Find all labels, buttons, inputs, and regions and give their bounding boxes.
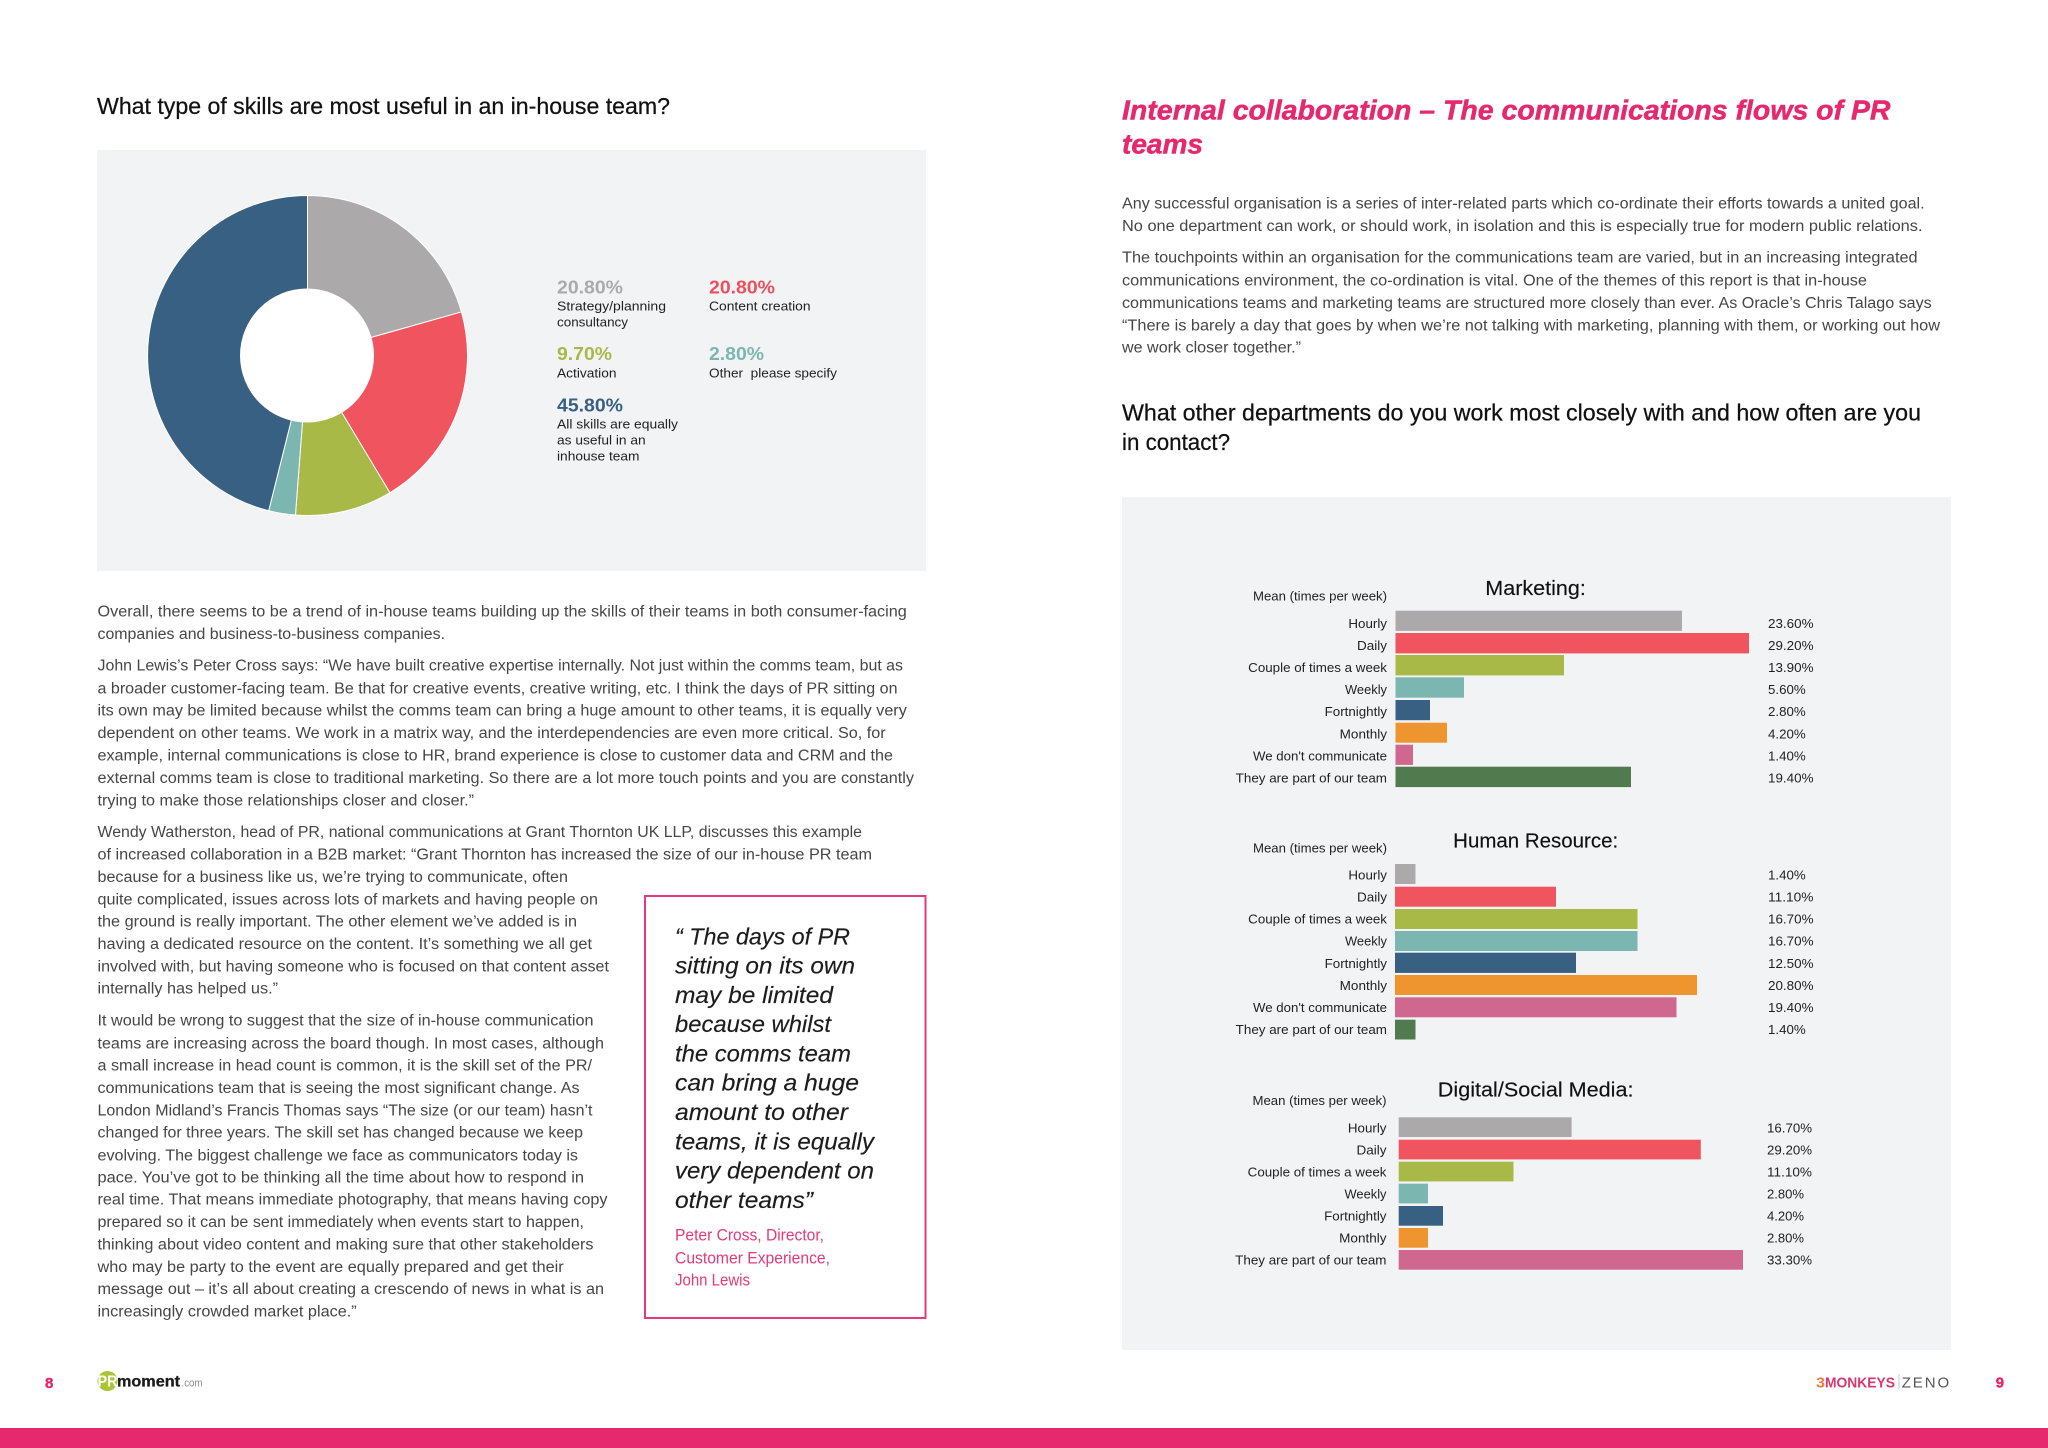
bar chart: Digital/Social Media: Hourly bbox=[1348, 1120, 1387, 1135]
bar chart: Human Resource: They are part of our team bbox=[1236, 1022, 1387, 1037]
text block: Peter Cross quote: a broader customer-facing team. Be that for creative events, creative writing, etc. I think the days of PR sitting on bbox=[98, 680, 898, 697]
footer bar bbox=[0, 1428, 2048, 1448]
bar chart: Digital/Social Media: Daily bbox=[1356, 1142, 1387, 1157]
legend: content creation: 20.80% bbox=[709, 277, 775, 297]
logo: 3 Monkeys Zeno bbox=[1816, 1374, 1949, 1392]
text block: touchpoints: The touchpoints within an organisation for the communications team are varied, but in an increasing integrated bbox=[1122, 250, 1918, 267]
legend: other: 2.80% bbox=[709, 344, 764, 364]
title: internal collaboration: teams bbox=[1122, 128, 1203, 159]
bar chart: Marketing bbox=[1236, 578, 1814, 787]
legend: all skills equally useful bbox=[557, 395, 679, 464]
quote text: can bring a huge bbox=[675, 1070, 859, 1096]
text block: touchpoints: communications environment, the co-ordination is vital. One of the themes of this report is that in-house bbox=[1122, 272, 1867, 289]
text block: Wendy Watherston quote: internally has helped us.” bbox=[98, 981, 278, 998]
logo: PRmoment bbox=[98, 1371, 202, 1391]
text block: size of in-house teams: It would be wrong to suggest that the size of in-house communication bbox=[98, 1013, 594, 1030]
text block: size of in-house teams: London Midland’s Francis Thomas says “The size (or our team) hasn’t bbox=[98, 1102, 593, 1119]
bar chart: Digital/Social Media: Mean (times per week) bbox=[1252, 1093, 1386, 1108]
text block: Peter Cross quote bbox=[98, 658, 914, 809]
quote attribution bbox=[675, 1227, 830, 1289]
heading: departments question bbox=[1122, 400, 1921, 455]
bar chart: Human Resource: 12.50% bbox=[1768, 956, 1814, 971]
bar chart: Digital/Social Media: 29.20% bbox=[1767, 1142, 1812, 1157]
heading: skills question: What type of skills are most useful in an in-house team? bbox=[97, 93, 670, 119]
text block: successful organisation: No one department can work, or should work, in isolation and this is especially true for modern public relations. bbox=[1122, 218, 1922, 235]
quote attribution: Peter Cross, Director, bbox=[675, 1227, 824, 1245]
bar chart: Marketing: Daily bbox=[1357, 638, 1388, 653]
legend: all skills equally useful: All skills are equally bbox=[557, 417, 679, 432]
bar chart: Marketing: Weekly bbox=[1345, 682, 1387, 697]
bar chart: Digital/Social Media: 11.10% bbox=[1767, 1164, 1812, 1179]
bar chart: Human Resource: 19.40% bbox=[1768, 1000, 1814, 1015]
bar chart: Digital/Social Media: 2.80% bbox=[1767, 1230, 1804, 1245]
legend: content creation: Content creation bbox=[709, 299, 811, 314]
text block: size of in-house teams: real time. That means immediate photography, that means having copy bbox=[98, 1192, 608, 1209]
quote text bbox=[675, 923, 876, 1213]
heading: departments question: in contact? bbox=[1122, 429, 1230, 455]
quote text: sitting on its own bbox=[675, 953, 855, 979]
logo: 3 Monkeys Zeno: ZENO bbox=[1902, 1375, 1949, 1392]
text block: size of in-house teams: increasingly crowded market place.” bbox=[98, 1303, 357, 1320]
callout: pull quote bbox=[645, 896, 926, 1318]
text block: size of in-house teams: who may be party to the event are equally prepared and get their bbox=[96, 1259, 564, 1276]
quote text: “ The days of PR bbox=[675, 923, 850, 949]
text block: successful organisation bbox=[1122, 196, 1925, 235]
bar chart: Marketing: Monthly bbox=[1340, 726, 1388, 741]
text block: Wendy Watherston quote bbox=[98, 824, 872, 998]
title: internal collaboration: Internal collaboration – The communications flows of PR bbox=[1122, 94, 1891, 125]
text block: touchpoints: communications teams and marketing teams are structured more closely than ever. As Oracle’s Chris Talago says bbox=[1122, 295, 1932, 312]
legend: activation bbox=[557, 344, 616, 380]
bar chart: Marketing: 5.60% bbox=[1768, 682, 1806, 697]
legend: strategy/planning consultancy: consultancy bbox=[557, 314, 629, 329]
text block: size of in-house teams: communications team that is seeing the most significant change. As bbox=[98, 1080, 580, 1097]
bar chart: Digital/Social Media: 4.20% bbox=[1767, 1208, 1804, 1223]
bar chart: Human Resource: Hourly bbox=[1348, 867, 1388, 882]
quote text: because whilst bbox=[675, 1011, 833, 1037]
bar chart: Marketing: Hourly bbox=[1348, 616, 1388, 631]
bar chart: Digital/Social Media: 16.70% bbox=[1767, 1120, 1812, 1135]
bar chart: Human Resource: We don't communicate bbox=[1253, 1000, 1387, 1015]
bar chart: Marketing: 4.20% bbox=[1768, 726, 1806, 741]
bar chart: Human Resource: 16.70% bbox=[1768, 934, 1814, 949]
bar chart: Marketing: 13.90% bbox=[1768, 660, 1814, 675]
legend: strategy/planning consultancy bbox=[557, 277, 666, 329]
bar chart: Marketing: Couple of times a week bbox=[1248, 660, 1388, 675]
text block: overall trend: companies and business-to-business companies. bbox=[98, 626, 445, 643]
bar chart: Digital/Social Media: 2.80% bbox=[1767, 1186, 1804, 1201]
quote text: teams, it is equally bbox=[675, 1128, 876, 1154]
quote text: very dependent on bbox=[675, 1158, 874, 1184]
panel: skills donut chart bbox=[97, 150, 926, 571]
quote text: the comms team bbox=[675, 1041, 851, 1067]
legend: strategy/planning consultancy: Strategy/planning bbox=[557, 299, 666, 314]
text block: overall trend bbox=[98, 603, 907, 643]
text block: size of in-house teams: evolving. The biggest challenge we face as communicators today is bbox=[98, 1147, 578, 1164]
bar chart: Marketing: We don't communicate bbox=[1253, 748, 1387, 763]
bar chart: Human Resource: 16.70% bbox=[1768, 912, 1814, 927]
text block: Wendy Watherston quote: quite complicated, issues across lots of markets and having people on bbox=[98, 891, 598, 908]
bar chart: Digital/Social Media bbox=[1235, 1079, 1812, 1270]
bar chart: Human Resource: Fortnightly bbox=[1325, 956, 1388, 971]
bar chart: Digital/Social Media: Couple of times a week bbox=[1248, 1164, 1387, 1179]
quote attribution: John Lewis bbox=[675, 1271, 750, 1289]
chart title: Marketing: Marketing: bbox=[1485, 578, 1586, 600]
bar chart: Human Resource: 1.40% bbox=[1768, 867, 1806, 882]
legend: all skills equally useful: as useful in an bbox=[557, 433, 646, 448]
bar chart: Marketing: 1.40% bbox=[1768, 748, 1806, 763]
legend: other: Other please specify bbox=[709, 365, 838, 380]
text block: Peter Cross quote: its own may be limited because whilst the comms team can bring a huge amount to other teams, it is equally very bbox=[98, 703, 907, 720]
bar chart: Human Resource bbox=[1236, 830, 1814, 1040]
logo: PRmoment: moment bbox=[117, 1374, 181, 1391]
bar chart: Digital/Social Media: Fortnightly bbox=[1324, 1208, 1387, 1223]
page number 9: 9 bbox=[1996, 1375, 2004, 1392]
chart title: Digital/Social Media: Digital/Social Media: bbox=[1438, 1079, 1634, 1101]
bar chart: Marketing: They are part of our team bbox=[1236, 770, 1387, 785]
text block: size of in-house teams: pace. You’ve got to be thinking all the time about how to respond in bbox=[98, 1170, 584, 1187]
text block: Wendy Watherston quote: having a dedicated resource on the content. It’s something we all get bbox=[98, 936, 593, 953]
bar chart: Marketing: 29.20% bbox=[1768, 638, 1814, 653]
bar chart: Human Resource: 11.10% bbox=[1768, 890, 1814, 904]
text block: successful organisation: Any successful organisation is a series of inter-related parts which co-ordinate their efforts towards a united goal. bbox=[1122, 196, 1925, 213]
bar chart: Human Resource: Daily bbox=[1357, 890, 1388, 904]
panel: department contact charts bbox=[1122, 497, 1951, 1350]
bar chart: Digital/Social Media: 33.30% bbox=[1767, 1252, 1812, 1267]
chart title: Human Resource: Human Resource: bbox=[1453, 830, 1618, 852]
text block: size of in-house teams: prepared so it can be sent immediately when events start to happen, bbox=[98, 1214, 584, 1231]
text block: Wendy Watherston quote: of increased collaboration in a B2B market: “Grant Thornton has increased the size of our in-house PR team bbox=[98, 846, 872, 863]
text block: size of in-house teams: message out – it’s all about creating a crescendo of news in what is an bbox=[98, 1281, 604, 1298]
text block: Wendy Watherston quote: the ground is really important. The other element we’ve added is in bbox=[98, 913, 577, 930]
logo: PRmoment: PR bbox=[98, 1374, 118, 1390]
text block: Peter Cross quote: example, internal communications is close to HR, brand experience is close to customer data and CRM and the bbox=[98, 747, 893, 764]
logo: 3 Monkeys Zeno: MONKEYS bbox=[1825, 1375, 1895, 1392]
logo: PRmoment: .com bbox=[182, 1378, 202, 1390]
quote text: amount to other bbox=[675, 1099, 849, 1125]
text block: Peter Cross quote: dependent on other teams. We work in a matrix way, and the interdependencies are even more critical. So, for bbox=[98, 725, 886, 742]
text block: size of in-house teams: a small increase in head count is common, it is the skill set of the PR/ bbox=[98, 1058, 593, 1075]
text block: Wendy Watherston quote: Wendy Watherston, head of PR, national communications at Grant Thornton UK LLP, discusses this example bbox=[98, 824, 862, 841]
text block: size of in-house teams: teams are increasing across the board though. In most cases, although bbox=[98, 1035, 604, 1052]
quote attribution: Customer Experience, bbox=[675, 1249, 830, 1267]
bar chart: Marketing: Mean (times per week) bbox=[1253, 589, 1387, 604]
bar chart: Digital/Social Media: Weekly bbox=[1344, 1186, 1387, 1201]
legend: all skills equally useful: inhouse team bbox=[557, 449, 640, 464]
heading: departments question: What other departments do you work most closely with and how often are you bbox=[1122, 400, 1921, 426]
text block: Wendy Watherston quote: because for a business like us, we’re trying to communicate, often bbox=[98, 869, 568, 886]
legend: activation: 9.70% bbox=[557, 344, 612, 364]
quote text: other teams” bbox=[675, 1187, 814, 1213]
legend: other bbox=[709, 344, 838, 380]
legend: strategy/planning consultancy: 20.80% bbox=[557, 277, 623, 297]
bar chart: Marketing: 23.60% bbox=[1768, 616, 1814, 631]
page number 8: 8 bbox=[45, 1375, 53, 1392]
bar chart: Human Resource: Monthly bbox=[1340, 978, 1388, 993]
bar chart: Human Resource: 20.80% bbox=[1768, 978, 1814, 993]
text block: Peter Cross quote: external comms team is close to traditional marketing. So there are a lot more touch points and you are constantly bbox=[98, 770, 914, 787]
bar chart: Human Resource: Mean (times per week) bbox=[1253, 840, 1387, 855]
text block: Wendy Watherston quote: involved with, but having someone who is focused on that content asset bbox=[98, 958, 610, 975]
text block: overall trend: Overall, there seems to be a trend of in-house teams building up the skills of their teams in both consumer-facing bbox=[98, 603, 907, 620]
text block: Peter Cross quote: trying to make those relationships closer and closer.” bbox=[98, 792, 474, 809]
text block: touchpoints: “There is barely a day that goes by when we’re not talking with marketing, planning with them, or working out how bbox=[1122, 317, 1941, 334]
text block: size of in-house teams: changed for three years. The skill set has changed because we keep bbox=[98, 1125, 583, 1142]
bar chart: Marketing: 2.80% bbox=[1768, 704, 1806, 719]
bar chart: Human Resource: Couple of times a week bbox=[1248, 912, 1388, 927]
title: internal collaboration bbox=[1122, 94, 1891, 159]
text block: size of in-house teams bbox=[96, 1013, 608, 1320]
quote text: may be limited bbox=[675, 982, 834, 1008]
text block: size of in-house teams: thinking about video content and making sure that other stakeholders bbox=[98, 1236, 594, 1253]
bar chart: Human Resource: Weekly bbox=[1345, 934, 1387, 949]
text block: touchpoints: we work closer together.” bbox=[1121, 340, 1301, 357]
legend: content creation bbox=[709, 277, 811, 314]
legend: all skills equally useful: 45.80% bbox=[557, 395, 623, 415]
text block: touchpoints bbox=[1121, 250, 1941, 357]
bar chart: Digital/Social Media: Monthly bbox=[1339, 1230, 1387, 1245]
bar chart: Marketing: 19.40% bbox=[1768, 770, 1814, 785]
bar chart: Digital/Social Media: They are part of our team bbox=[1235, 1252, 1386, 1267]
bar chart: Human Resource: 1.40% bbox=[1768, 1022, 1806, 1037]
bar chart: Marketing: Fortnightly bbox=[1325, 704, 1388, 719]
chart: skills donut bbox=[148, 196, 468, 516]
legend: activation: Activation bbox=[557, 365, 616, 380]
text block: Peter Cross quote: John Lewis’s Peter Cross says: “We have built creative expertise internally. Not just within the comms team, but as bbox=[98, 658, 903, 675]
logo: 3 Monkeys Zeno: 3 bbox=[1816, 1375, 1825, 1392]
